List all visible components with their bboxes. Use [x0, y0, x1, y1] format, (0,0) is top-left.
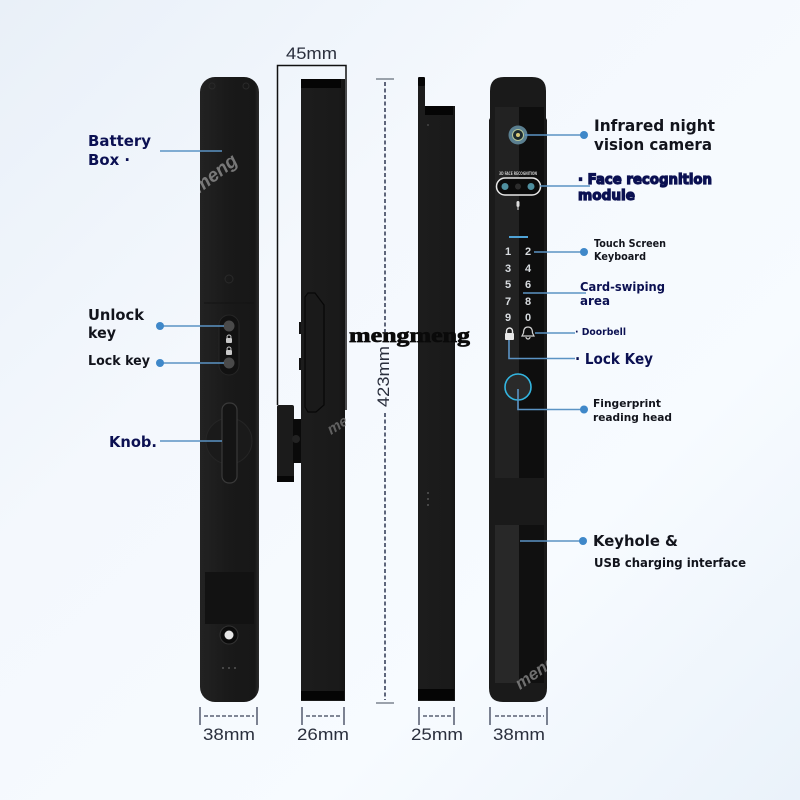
callout: lock key left [88, 353, 224, 369]
callout: infrared night vision camera [525, 116, 715, 154]
callout: face recognition module [540, 172, 712, 204]
keypad digits: 3 [505, 263, 511, 275]
keypad digits: 8 [525, 296, 531, 308]
keypad digits: 4 [525, 263, 532, 275]
face recognition module [496, 171, 540, 210]
callout: keyhole and USB charging interface: Keyhole & [593, 532, 678, 550]
callout: keyhole and USB charging interface [520, 532, 746, 570]
bottom dimension: body 25mm: 25mm [411, 726, 463, 744]
callout: unlock key: key [88, 324, 116, 342]
icon: lock key [505, 328, 514, 340]
icon: doorbell [522, 327, 534, 339]
callout: face recognition module: module [578, 188, 635, 204]
height label: 423mm [375, 346, 393, 407]
callout: infrared night vision camera: vision camera [594, 135, 712, 154]
callout: knob [109, 433, 222, 451]
side view with 45mm outline and knob [277, 66, 346, 701]
bottom dimension: front 38mm: 38mm [203, 726, 255, 744]
callout: unlock key: Unlock [88, 306, 145, 324]
top width label: 45mm [286, 45, 337, 63]
callout: doorbell [535, 327, 626, 338]
bottom dimension: side 26mm: 26mm [297, 726, 349, 744]
callout: lock key left: Lock key [88, 353, 150, 369]
keypad digits: 6 [525, 279, 531, 291]
callout: fingerprint reading head [518, 389, 672, 424]
callout: knob: Knob. [109, 433, 157, 451]
icon: fingerprint reader [505, 374, 531, 400]
callout: doorbell: · Doorbell [575, 327, 626, 338]
bottom dimension: side 26mm [297, 707, 349, 744]
callout: battery box: Box · [88, 151, 130, 169]
bottom dimension: body 25mm [411, 707, 463, 744]
bottom dimension: panel 38mm [490, 707, 547, 744]
watermark: meng on side view: meng [324, 403, 367, 438]
callout: unlock key [88, 306, 224, 342]
keypad digits: 2 [525, 246, 531, 258]
callout: battery box [88, 132, 222, 169]
callout: face recognition module: · Face recognition [578, 172, 712, 188]
watermark: meng on back panel: meng [189, 150, 242, 198]
keypad digits: 7 [505, 296, 511, 308]
callout: infrared night vision camera: Infrared night [594, 116, 715, 135]
callout: lock key right: · Lock Key [575, 350, 653, 368]
callout: touch screen keyboard [534, 238, 666, 263]
callout: card-swiping area: area [580, 293, 610, 308]
callout: card-swiping area [523, 279, 665, 308]
front view: keypad panel of lock [489, 77, 547, 702]
bottom dimension: front 38mm [200, 707, 257, 744]
keypad digits [505, 246, 532, 324]
callout: fingerprint reading head: Fingerprint [593, 397, 661, 410]
side view: narrow lock body [418, 77, 455, 701]
bottom dimension: panel 38mm: 38mm [493, 726, 545, 744]
keypad digits: 9 [505, 312, 511, 324]
keypad digits: 0 [525, 312, 531, 324]
face recognition module: 3D FACE RECOGNITION [499, 171, 537, 176]
callout: fingerprint reading head: reading head [593, 411, 672, 424]
watermark: mengmeng centre: mengmeng [349, 325, 470, 347]
keypad digits: 5 [505, 279, 511, 291]
callout: battery box: Battery [88, 132, 151, 150]
icon: infrared camera lens [508, 126, 528, 144]
callout: lock key right [509, 340, 653, 368]
watermark: meng on keypad panel: meng [511, 651, 560, 693]
callout: keyhole and USB charging interface: USB charging interface [594, 556, 746, 570]
callout: touch screen keyboard: Keyboard [594, 251, 646, 263]
keypad digits: 1 [505, 246, 511, 258]
callout: card-swiping area: Card-swiping [580, 279, 665, 294]
front view: back panel of lock [200, 77, 259, 702]
callout: touch screen keyboard: Touch Screen [594, 238, 666, 250]
height dimension line [376, 79, 394, 703]
